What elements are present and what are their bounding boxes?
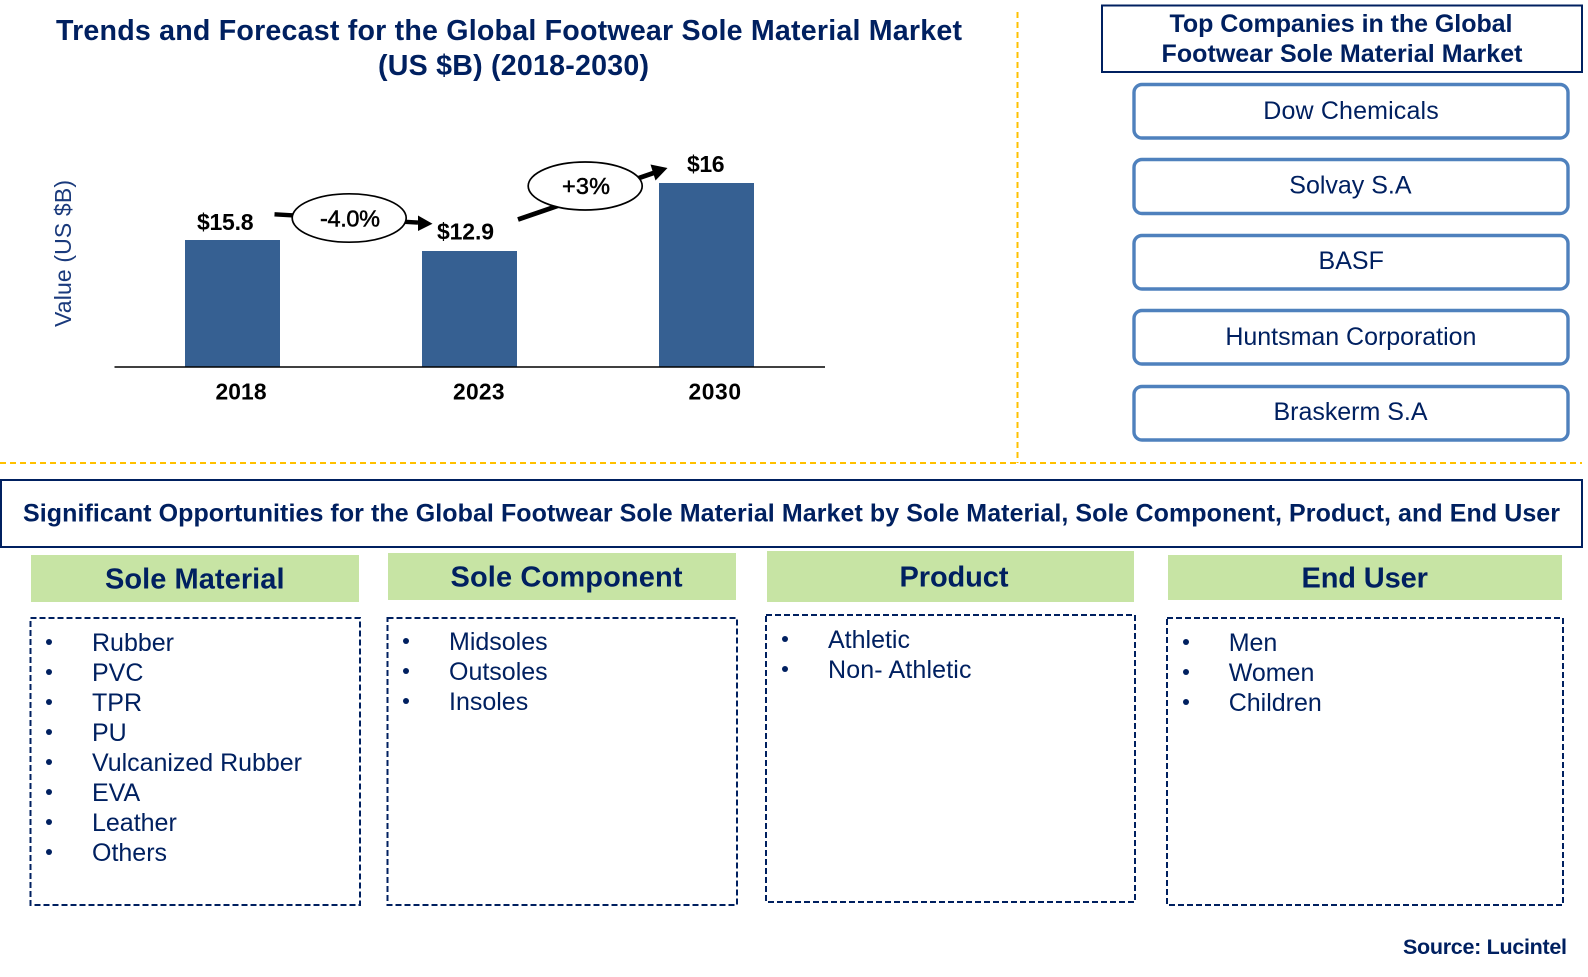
value label: 2030: $16 (687, 151, 724, 177)
list: end user (1167, 618, 1563, 905)
header: sole component: Sole Component (450, 562, 683, 594)
list: sole component: Midsoles (449, 628, 548, 656)
company: Huntsman Corporation (1134, 310, 1568, 364)
axis label: value: Value (US $B) (50, 180, 76, 327)
title: trends and forecast: Trends and Forecast for the Global Footwear Sole Material Market (56, 15, 962, 47)
year label: 2030: 2030 (688, 378, 741, 404)
bar: 2030 (659, 183, 754, 367)
title: trends and forecast: (US $B) (2018-2030) (378, 50, 649, 82)
company: Dow Chemicals: Dow Chemicals (1263, 97, 1439, 125)
bar: 2018 (185, 240, 280, 367)
list: sole component: Insoles (449, 688, 528, 716)
list: end user: Women (1229, 659, 1314, 687)
company: Huntsman Corporation: Huntsman Corporation (1225, 323, 1476, 351)
heading: significant opportunities: Significant Opportunities for the Global Footwear Sole Material Market by Sole Material, Sole Component, Product, and End User (23, 500, 1560, 528)
list: sole material (30, 618, 360, 905)
header: sole material: Sole Material (105, 563, 284, 595)
list: sole material: Others (92, 839, 167, 867)
callout: +3%: +3% (562, 173, 610, 199)
header: end user (1168, 555, 1562, 600)
heading: top companies: Top Companies in the Global (1170, 10, 1512, 38)
list: end user: Children (1229, 689, 1322, 717)
company: Dow Chemicals (1134, 84, 1568, 138)
list: sole material: PU (92, 719, 127, 747)
company: BASF: BASF (1318, 247, 1384, 275)
list: product: Non- Athletic (828, 656, 972, 684)
callout: -4.0%: -4.0% (320, 206, 380, 232)
list: sole material: EVA (92, 779, 140, 807)
title: trends and forecast (56, 15, 962, 82)
callout: +3% (528, 162, 642, 210)
list: product: Athletic (828, 626, 910, 654)
panel: product (766, 551, 1135, 902)
list: sole component (388, 618, 737, 905)
heading: significant opportunities (1, 480, 1582, 547)
arrow: 2018 to 2023 (274, 214, 432, 231)
panel: top companies (1102, 6, 1582, 440)
list: sole material: Rubber (92, 629, 174, 657)
value label: 2018: $15.8 (197, 209, 254, 235)
header: product (767, 551, 1134, 602)
year label: 2018: 2018 (216, 378, 266, 404)
bar chart: market value 2018-2030 (50, 151, 825, 404)
arrow: 2023 to 2030 (518, 164, 668, 220)
header: product: Product (900, 562, 1009, 594)
panel: sole material (30, 555, 360, 905)
list: sole material: Leather (92, 809, 177, 837)
callout: -4.0% (292, 194, 406, 242)
header: sole material (31, 555, 359, 602)
list: sole material: TPR (92, 689, 142, 717)
header: end user: End User (1302, 562, 1428, 594)
company: Solvay S.A (1134, 160, 1568, 214)
year label: 2023: 2023 (453, 378, 504, 404)
source note: Source: Lucintel (1403, 935, 1567, 959)
heading: top companies (1102, 6, 1582, 72)
header: sole component (388, 553, 736, 600)
list: sole component: Outsoles (449, 658, 548, 686)
list: product (766, 615, 1135, 902)
bar: 2023 (422, 251, 517, 367)
panel: end user (1167, 555, 1563, 905)
heading: top companies: Footwear Sole Material Market (1162, 40, 1523, 68)
company: Braskerm S.A: Braskerm S.A (1274, 398, 1428, 426)
list: end user: Men (1229, 629, 1277, 657)
panel: sole component (388, 553, 737, 905)
value label: 2023: $12.9 (437, 218, 494, 244)
list: sole material: PVC (92, 659, 143, 687)
company: Solvay S.A: Solvay S.A (1289, 172, 1412, 200)
company: BASF (1134, 236, 1568, 289)
company: Braskerm S.A (1134, 386, 1568, 440)
list: sole material: Vulcanized Rubber (92, 749, 302, 777)
